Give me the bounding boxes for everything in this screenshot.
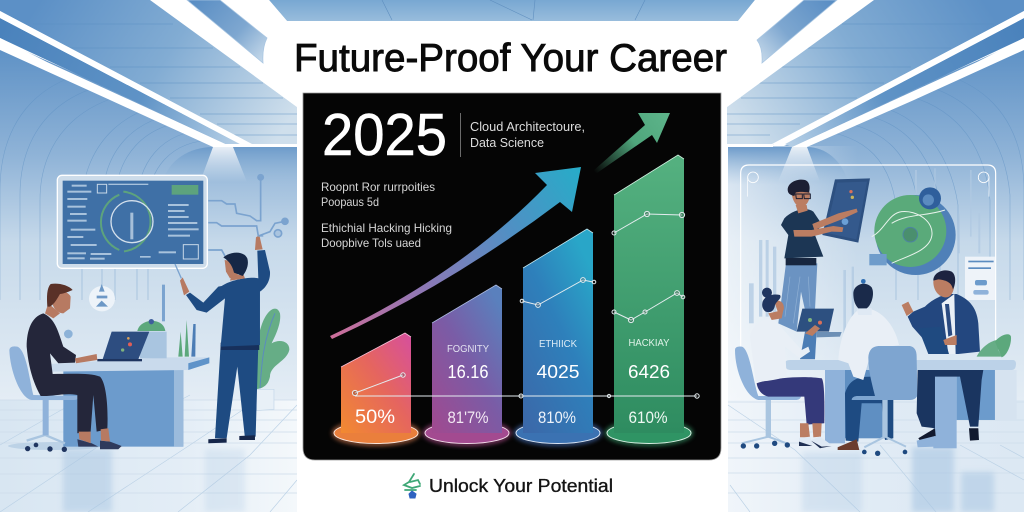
table laptop — [797, 309, 842, 359]
green data globe — [869, 187, 956, 275]
bar 3 blue: ETHIICK — [539, 339, 577, 350]
floating dot — [64, 330, 73, 338]
bar 4 green: 610% — [628, 408, 668, 427]
left floor — [0, 395, 297, 512]
seated woman with chair — [735, 288, 832, 449]
seated man in suit — [902, 270, 1011, 447]
holographic frame — [741, 165, 996, 350]
seated person with chair — [9, 284, 122, 452]
center ceiling panel — [269, 0, 755, 21]
holographic wall screen — [57, 175, 207, 268]
info card — [965, 257, 995, 300]
desk with laptop — [50, 285, 209, 447]
topic text: Data Science — [470, 135, 544, 150]
left light strips — [0, 11, 297, 147]
data line overlays — [352, 211, 699, 398]
bar 4 green — [607, 155, 691, 444]
bar 3 blue: 810% — [538, 408, 576, 427]
floating icon bubble — [89, 284, 115, 311]
gradient growth arrow — [330, 167, 581, 339]
meeting table — [785, 360, 1017, 448]
footer logo icon — [404, 474, 420, 498]
left note text: Roopnt Ror rurrpoities — [321, 180, 435, 194]
right ceiling panel — [727, 0, 1024, 145]
right light strips — [727, 11, 1024, 147]
right floor — [728, 400, 1024, 512]
green trend arrow — [593, 113, 670, 173]
left room backdrop — [0, 40, 297, 420]
left note text — [321, 180, 452, 250]
standing man with tablet — [778, 178, 870, 332]
bar 2 purple — [425, 285, 509, 444]
bar 1 orange — [334, 333, 418, 444]
standing person pointing at screen — [175, 235, 270, 443]
title: Future-Proof Your Career — [294, 37, 727, 80]
bar 4 green: HACKIAY — [628, 338, 670, 349]
bar 2 purple: FOGNITY — [447, 344, 489, 355]
left note text: Poopaus 5d — [321, 195, 379, 209]
seated man center back view with chair — [838, 279, 917, 456]
bar 3 blue — [516, 229, 600, 444]
left ceiling beam — [187, 0, 267, 63]
footer tagline: Unlock Your Potential — [429, 476, 613, 496]
bar 4 green: 6426 — [628, 362, 670, 382]
white center column — [150, 0, 874, 512]
bar 2 purple: 81'7% — [448, 408, 488, 427]
left note text: Doopbive Tols uaed — [321, 236, 421, 250]
topic text — [470, 119, 585, 150]
topic text: Cloud Architectoure, — [470, 119, 585, 134]
glowing bar bases — [334, 422, 691, 444]
right ceiling beam — [757, 0, 837, 63]
bar 3 blue: 4025 — [536, 362, 580, 382]
left note text: Ethichial Hacking Hicking — [321, 221, 452, 235]
bar 1 orange: 50% — [355, 407, 395, 428]
heading divider — [460, 113, 461, 157]
main dark chart panel — [303, 93, 721, 460]
left scene: people at desk and wall screen — [9, 175, 289, 452]
right scene: team meeting — [735, 165, 1017, 456]
circuit lines — [208, 175, 288, 256]
year heading: 2025 — [322, 102, 447, 168]
bar 2 purple: 16.16 — [448, 362, 488, 382]
left ceiling panel — [0, 0, 297, 145]
potted plant on left floor — [255, 309, 289, 411]
background data bars — [749, 168, 980, 333]
right room backdrop — [728, 40, 1024, 420]
